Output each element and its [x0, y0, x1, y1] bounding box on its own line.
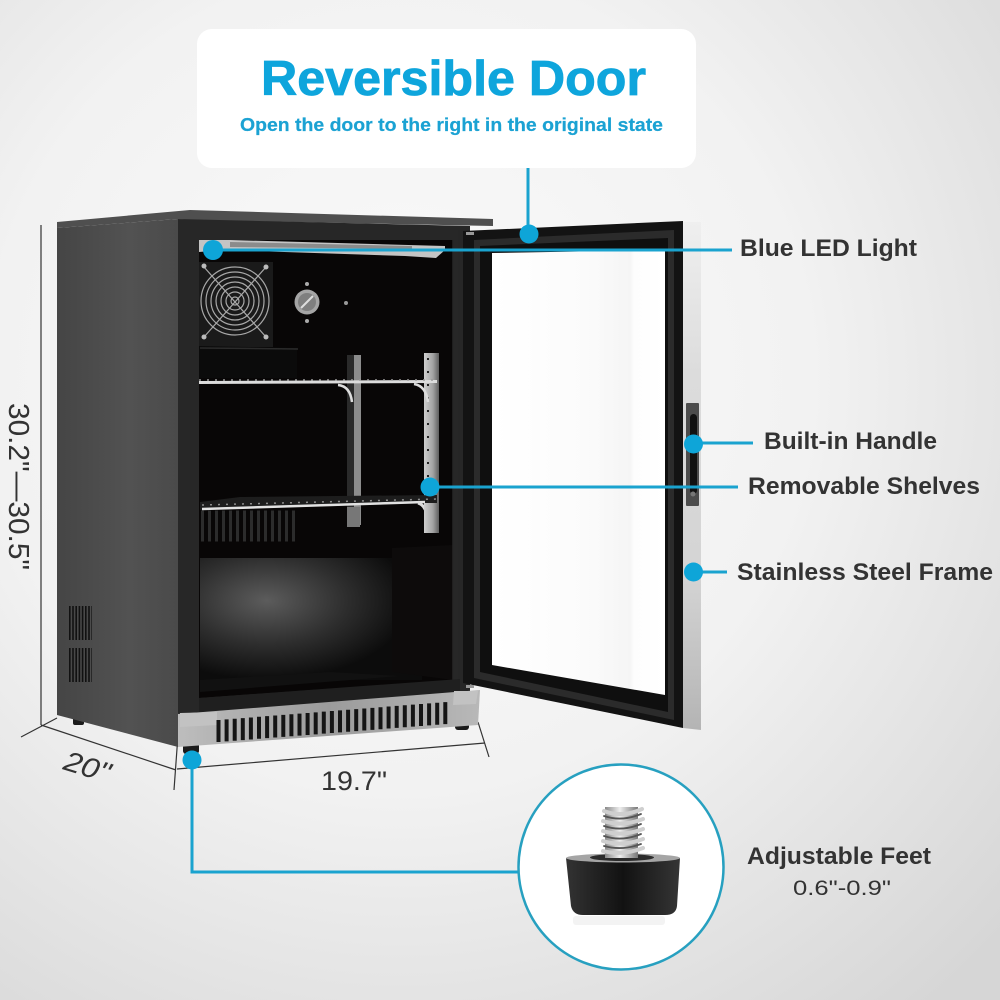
refrigerator cabinet: [57, 210, 493, 754]
dimension: depth: 20": [59, 745, 115, 789]
dimension: width: 19.7": [321, 766, 387, 796]
dimension: height: 30.2"—30.5": [2, 403, 34, 570]
label: Adjustable Feet: Adjustable Feet: [747, 843, 931, 870]
upper shelf: [199, 380, 437, 402]
label: Built-in Handle: Built-in Handle: [764, 428, 937, 455]
title card: [197, 29, 696, 168]
dimension lines: [21, 225, 489, 790]
lower shelf: [200, 495, 439, 533]
stainless steel frame: [683, 222, 701, 730]
door black frame: [463, 221, 683, 728]
kick plate: [178, 690, 480, 747]
LED bar: [199, 240, 445, 258]
front frame: [178, 219, 470, 745]
fan: [199, 262, 273, 347]
open door: [463, 221, 701, 730]
front upright: [424, 353, 439, 533]
side panel: [57, 219, 178, 747]
glass pane: [492, 250, 665, 695]
foot screw: [603, 807, 643, 858]
door inner profile: [474, 230, 674, 720]
heading: Reversible Door: [261, 52, 646, 106]
door gasket rails: [453, 230, 466, 690]
callout dots: [182, 224, 703, 770]
top surface: [57, 210, 493, 228]
label: Stainless Steel Frame: Stainless Steel Frame: [737, 559, 993, 586]
hinges: [466, 232, 474, 688]
built-in handle: [686, 403, 699, 506]
rubber base: [566, 854, 680, 915]
label: Blue LED Light: Blue LED Light: [740, 235, 917, 262]
subheading: Open the door to the right in the original state: [240, 115, 663, 135]
interior: [199, 240, 453, 698]
kick plate slots: [216, 702, 447, 742]
side vents: [69, 623, 92, 665]
lower vent: [201, 510, 295, 542]
label: foot range: 0.6"-0.9": [793, 877, 891, 900]
foot reflection: [573, 916, 665, 925]
rear vent: [199, 346, 298, 378]
interior floor-back panel: [200, 558, 422, 680]
front bottom band: [199, 679, 460, 714]
rear upright: [347, 355, 361, 525]
interior right wall: [392, 545, 453, 680]
callout leader lines: [192, 168, 753, 872]
label: Removable Shelves: Removable Shelves: [748, 473, 980, 500]
temperature knob: [294, 282, 348, 323]
inset: adjustable foot: [518, 764, 724, 970]
rear and right feet: [73, 712, 469, 754]
